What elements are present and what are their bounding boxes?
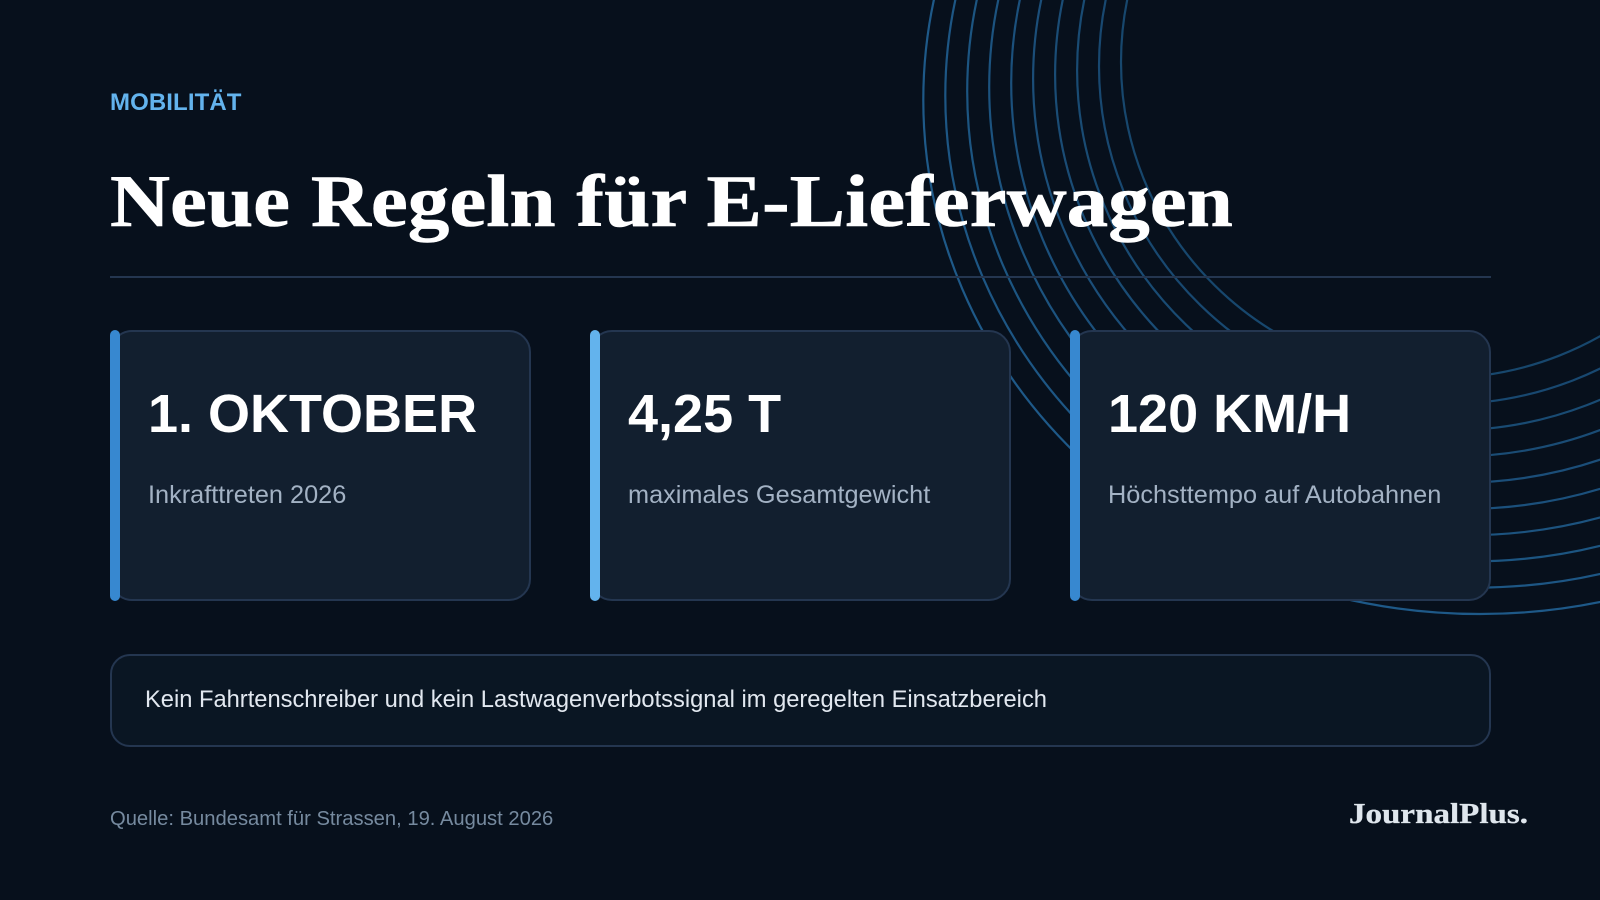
panel: speed card — [1070, 330, 1491, 601]
note text: Kein Fahrtenschreiber und kein Lastwagenverbotssignal im geregelten Einsatzbereich — [145, 687, 1047, 713]
accent bar — [110, 330, 120, 601]
label: Inkrafttreten 2026 — [148, 481, 346, 509]
logo: JournalPlus. — [1349, 799, 1528, 830]
value: 4,25 T — [628, 384, 781, 444]
accent bar — [590, 330, 600, 601]
accent bar — [1070, 330, 1080, 601]
title: Neue Regeln für E-Lieferwagen — [110, 161, 1233, 243]
value: 120 KM/H — [1108, 384, 1351, 444]
label: maximales Gesamtgewicht — [628, 481, 930, 509]
callout note — [110, 654, 1491, 747]
label: Höchsttempo auf Autobahnen — [1108, 481, 1441, 509]
panel: date card — [110, 330, 531, 601]
value: 1. OKTOBER — [148, 384, 477, 444]
panel: weight card — [590, 330, 1011, 601]
source: Quelle: Bundesamt für Strassen, 19. August 2026 — [110, 808, 553, 830]
divider — [110, 276, 1491, 278]
kicker: MOBILITÄT — [110, 89, 242, 116]
